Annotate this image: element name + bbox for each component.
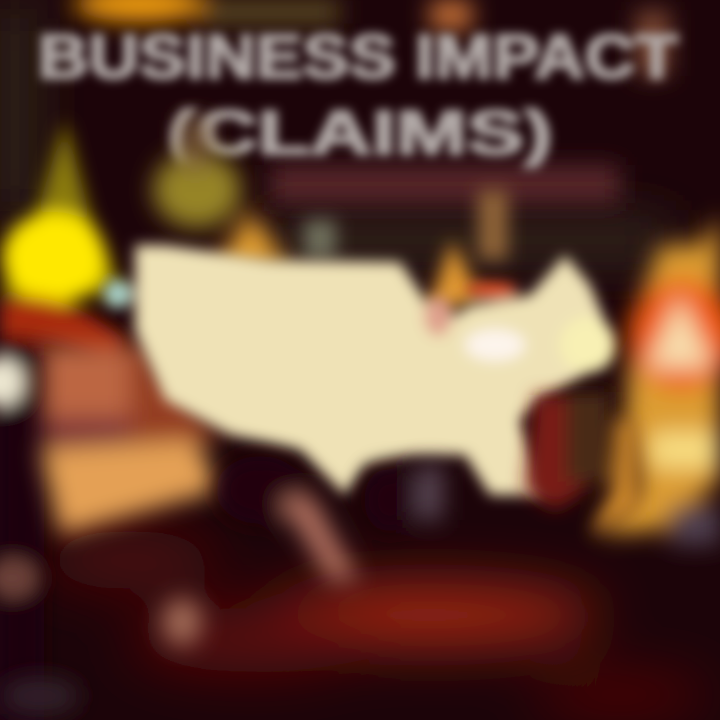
title	[38, 23, 678, 168]
banner band under title	[270, 165, 620, 203]
pale branch	[280, 495, 358, 580]
lamp flame	[0, 120, 125, 295]
USA map	[104, 245, 616, 495]
grey post	[304, 220, 336, 258]
centre small posts	[304, 190, 508, 315]
pale stone	[162, 598, 202, 646]
lamp shade	[0, 297, 125, 375]
lower right base	[670, 505, 720, 545]
highlighted east coast	[560, 317, 616, 373]
blue-grey post	[418, 465, 442, 520]
great lakes tint	[424, 296, 452, 336]
lower left glow	[0, 558, 38, 598]
warning triangle ring	[628, 281, 720, 389]
top band	[200, 0, 340, 24]
lower left shade	[0, 678, 80, 714]
dark foliage	[216, 456, 304, 524]
top decorations	[74, 0, 670, 203]
left lamp	[0, 120, 125, 720]
left panel: building	[40, 340, 225, 535]
title: (CLAIMS)	[168, 99, 552, 168]
brown column by coast	[525, 392, 640, 535]
title: BUSINESS IMPACT	[38, 23, 678, 92]
side ring	[0, 358, 24, 406]
signage text band	[650, 432, 720, 468]
orange post	[478, 190, 508, 260]
bright lakes area	[465, 329, 525, 361]
right panel: warning sign	[600, 215, 720, 545]
pacific marker	[104, 280, 132, 308]
small left lantern	[153, 120, 290, 268]
top right candle	[636, 10, 670, 76]
lamp post	[0, 345, 44, 720]
lower foreground	[0, 456, 442, 714]
top candle	[430, 0, 472, 30]
top lamp glow	[74, 0, 206, 22]
